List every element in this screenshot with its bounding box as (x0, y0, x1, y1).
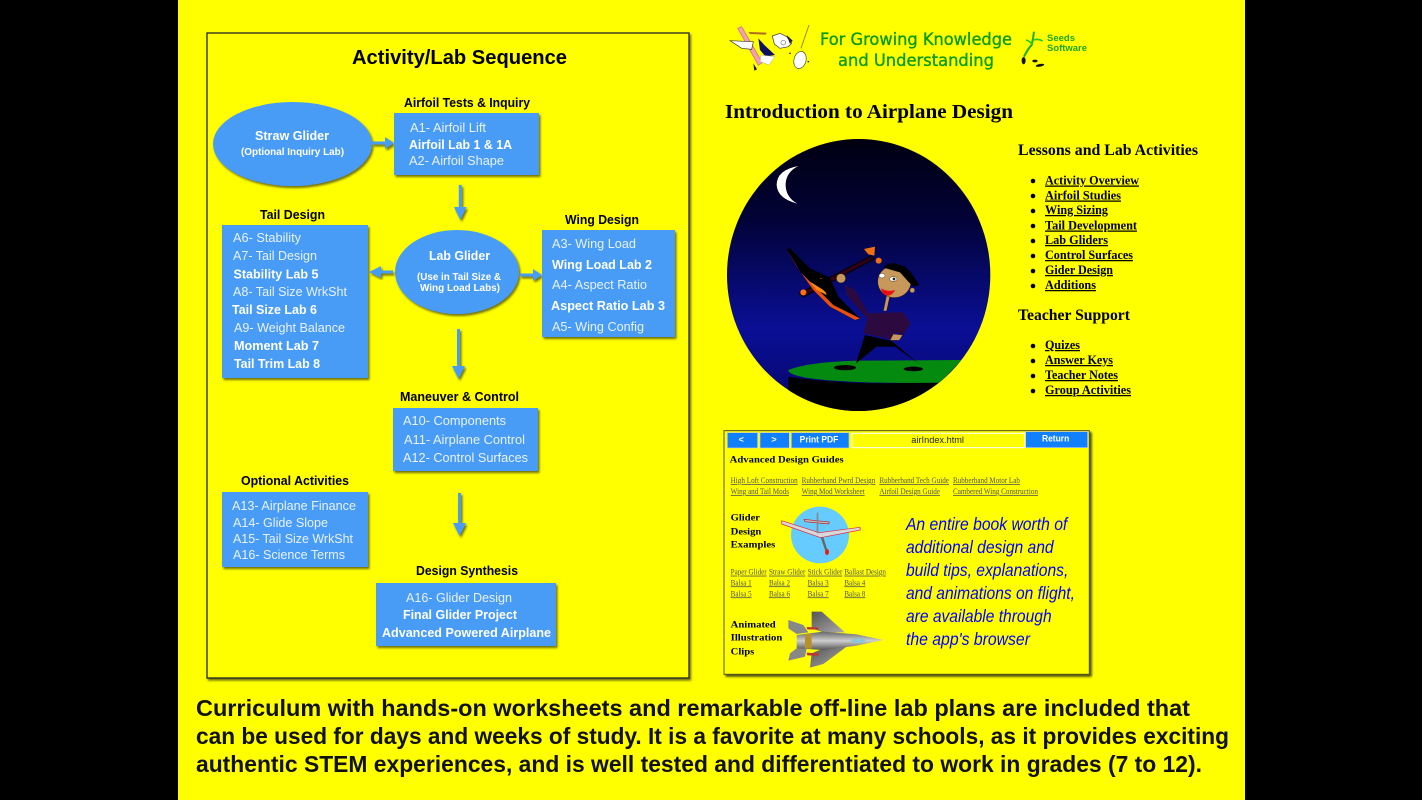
caption: curriculum description: can be used for days and weeks of study. It is a favorite at many schools, as it provides exciting (196, 723, 1229, 749)
box: tail design: Tail Size Lab 6 (232, 302, 317, 317)
icon: fighter jet (788, 612, 883, 668)
arrow: maneuver to synthesis (453, 493, 466, 536)
caption: curriculum description: Curriculum with hands-on worksheets and remarkable off-line lab plans are included that (196, 695, 1190, 721)
list: lessons: Additions (1045, 278, 1096, 292)
slogan: For Growing Knowledge (820, 30, 1012, 50)
seeds software: Software (1047, 43, 1087, 54)
browser toolbar: > (771, 435, 777, 445)
list: lessons: Airfoil Studies (1045, 188, 1121, 202)
box: tail design: A6- Stability (233, 230, 301, 245)
heading: teacher support: Teacher Support (1018, 307, 1131, 324)
box: optional activities: A13- Airplane Finance (232, 498, 356, 513)
arrow: airfoil to lab glider (454, 185, 466, 220)
arrow: lab glider to maneuver (452, 329, 465, 379)
heading: animated illustration clips (731, 620, 783, 657)
callout: browser description: are available through (906, 606, 1052, 626)
box: tail design: A7- Tail Design (233, 248, 317, 263)
links: glider designs (731, 568, 886, 598)
box: maneuver and control: A12- Control Surfaces (403, 450, 528, 465)
heading: advanced design guides: Advanced Design Guides (730, 455, 844, 465)
list: lessons: Wing Sizing (1045, 203, 1109, 217)
panel: activity/lab sequence (207, 33, 689, 678)
caption: curriculum description: authentic STEM experiences, and is well tested and differentiated to work in grades (7 to 12). (196, 751, 1202, 777)
box: maneuver and control: Maneuver & Control (400, 389, 519, 404)
links: guides: Cambered Wing Construction (953, 487, 1038, 496)
box: tail design: Tail Trim Lab 8 (234, 356, 320, 371)
callout: browser description: additional design and (906, 537, 1054, 557)
box: tail design: Moment Lab 7 (234, 338, 319, 353)
box: optional activities: A14- Glide Slope (233, 515, 328, 530)
links: glider designs: Straw Glider (769, 568, 806, 577)
box: tail design: A9- Weight Balance (234, 320, 345, 335)
heading: glider design examples: Design (731, 527, 762, 537)
links: glider designs: Ballast Design (844, 568, 886, 577)
box: tail design (222, 207, 368, 378)
links: glider designs: Balsa 4 (844, 578, 865, 587)
oval: straw glider: Straw Glider (255, 128, 329, 143)
box: wing design: Wing Load Lab 2 (552, 257, 652, 272)
heading: lessons: Lessons and Lab Activities (1018, 142, 1198, 159)
heading: glider design examples: Examples (731, 541, 776, 551)
callout: browser description: and animations on flight, (906, 583, 1075, 603)
slogan: and Understanding (838, 51, 994, 71)
list: lessons: Gider Design (1045, 263, 1113, 277)
oval: lab glider (395, 230, 519, 314)
box: tail design: Tail Design (260, 207, 325, 222)
box: wing design: A3- Wing Load (552, 236, 636, 251)
links: glider designs: Balsa 5 (731, 589, 752, 598)
box: airfoil tests: A2- Airfoil Shape (409, 153, 504, 168)
box: wing design: A4- Aspect Ratio (552, 277, 647, 292)
list: teacher support (1031, 338, 1131, 397)
links: guides: Rubberband Tech Guide (879, 476, 949, 485)
heading: animated illustration clips: Clips (731, 647, 755, 657)
box: optional activities: Optional Activities (241, 473, 349, 488)
callout: browser description: An entire book worth of (905, 514, 1069, 534)
slogan (820, 30, 1012, 71)
links: guides: Wing Mod Worksheet (802, 487, 865, 496)
links: guides (731, 476, 1038, 496)
box: airfoil tests: Airfoil Lab 1 & 1A (409, 137, 513, 152)
heading: glider design examples (731, 514, 776, 551)
list: teacher support: Group Activities (1045, 383, 1131, 397)
box: tail design: A8- Tail Size WrkSht (233, 284, 347, 299)
box: wing design: Wing Design (565, 212, 639, 227)
browser toolbar: Print PDF (800, 434, 839, 444)
illustration: boy launching glider at night (727, 139, 990, 417)
box: tail design: Stability Lab 5 (234, 266, 318, 282)
box: optional activities: A16- Science Terms (233, 547, 345, 562)
list: teacher support: Quizes (1045, 338, 1080, 352)
box: wing design: A5- Wing Config (552, 319, 644, 334)
list: teacher support: Teacher Notes (1045, 368, 1118, 382)
links: glider designs: Balsa 6 (769, 589, 790, 598)
callout: browser description: build tips, explanations, (906, 560, 1068, 580)
browser toolbar: Return (1042, 434, 1069, 444)
oval: lab glider: (Use in Tail Size & (417, 272, 501, 283)
box: design synthesis: Advanced Powered Airplane (382, 625, 551, 640)
oval: lab glider: Wing Load Labs) (420, 283, 500, 294)
panel: app browser screenshot (724, 431, 1089, 674)
arrow: lab glider to tail design (369, 266, 393, 278)
arrow: straw glider to airfoil (372, 137, 394, 149)
box: optional activities (222, 473, 368, 567)
links: glider designs: Balsa 7 (808, 589, 829, 598)
links: guides: Rubberband Motor Lab (953, 476, 1020, 485)
box: design synthesis: Final Glider Project (403, 607, 518, 622)
browser toolbar (727, 432, 1088, 448)
boy and glider (787, 247, 919, 363)
night sky and ground (727, 139, 990, 417)
box: airfoil tests: A1- Airfoil Lift (410, 120, 486, 135)
box: maneuver and control: A10- Components (403, 413, 506, 428)
heading: glider design examples: Glider (731, 514, 760, 524)
list: lessons: Tail Development (1045, 218, 1138, 232)
links: guides: Rubberband Pwrd Design (802, 476, 875, 485)
links: glider designs: Balsa 8 (844, 589, 865, 598)
box: wing design: Aspect Ratio Lab 3 (551, 298, 665, 313)
box: airfoil tests: Airfoil Tests & Inquiry (404, 95, 531, 110)
box: maneuver and control (393, 389, 538, 471)
links: glider designs: Balsa 1 (731, 578, 752, 587)
seeds software (1047, 33, 1087, 54)
icon: glider on blue circle (782, 507, 860, 563)
links: glider designs: Balsa 2 (769, 578, 790, 587)
title: Activity/Lab Sequence (352, 47, 567, 69)
oval: straw glider: (Optional Inquiry Lab) (241, 147, 344, 158)
heading: animated illustration clips: Animated (731, 620, 777, 630)
browser toolbar: airIndex.html (911, 435, 964, 445)
logo: for growing knowledge (730, 25, 1087, 71)
heading: animated illustration clips: Illustration (731, 634, 783, 644)
panel: lessons and lab activities (1018, 142, 1198, 397)
yellow page background (178, 0, 1245, 800)
list: lessons: Control Surfaces (1045, 248, 1133, 262)
box: design synthesis: A16- Glider Design (406, 590, 512, 605)
box: maneuver and control: A11- Airplane Control (404, 432, 525, 447)
oval: straw glider (213, 102, 372, 186)
box: design synthesis: Design Synthesis (416, 563, 518, 578)
browser toolbar: < (739, 435, 744, 445)
list: lessons: Lab Gliders (1045, 233, 1108, 247)
links: glider designs: Paper Glider (731, 568, 767, 577)
list: teacher support: Answer Keys (1045, 353, 1113, 367)
links: guides: High Loft Construction (731, 476, 798, 485)
callout: browser description (905, 514, 1075, 649)
oval: lab glider: Lab Glider (429, 248, 490, 263)
arrow: lab glider to wing design (520, 269, 542, 281)
box: wing design (542, 212, 675, 337)
caption: curriculum description (196, 695, 1229, 777)
seeds software: Seeds (1047, 33, 1075, 44)
box: design synthesis (376, 563, 556, 646)
list: lessons: Activity Overview (1045, 174, 1139, 188)
box: airfoil tests (394, 95, 539, 175)
list: lessons (1031, 174, 1139, 292)
links: glider designs: Balsa 3 (808, 578, 829, 587)
icon: cartoon pilot and plane (730, 25, 809, 71)
icon: seedling (1022, 32, 1044, 67)
callout: browser description: the app's browser (906, 629, 1031, 649)
box: optional activities: A15- Tail Size WrkSht (233, 531, 353, 546)
links: glider designs: Stick Glider (808, 568, 843, 577)
links: guides: Wing and Tail Mods (731, 487, 789, 496)
heading: introduction: Introduction to Airplane Design (725, 101, 1013, 123)
links: guides: Airfoil Design Guide (879, 487, 940, 496)
